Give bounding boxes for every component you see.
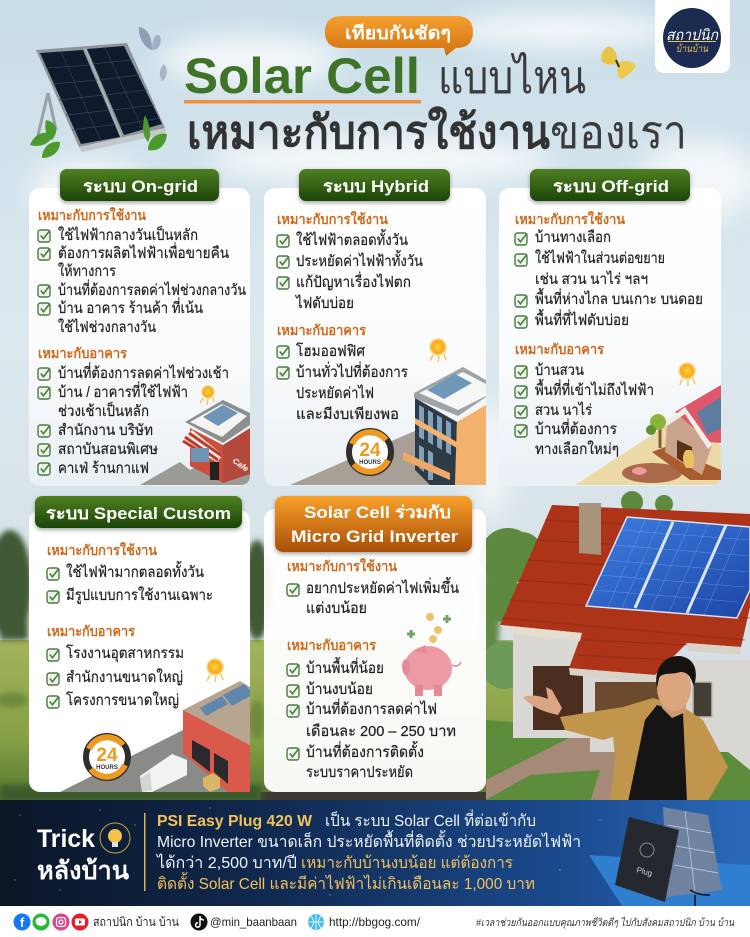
header: On-grid: [60, 169, 219, 201]
heading: suitable use: เหมาะกับการใช้งาน: [515, 210, 625, 227]
list: suitable use: ใช้ไฟฟ้าในส่วนต่อขยาย: [535, 249, 665, 267]
list: suitable buildings: สำนักงาน บริษัท: [58, 422, 153, 439]
text: product description: เหมาะกับบ้านงบน้อย แต่ต้องการ: [301, 854, 513, 872]
grass and driveway: [486, 720, 750, 802]
illustration: cafe with solar roof: Cafe: [231, 456, 251, 474]
list: suitable use: เช่น สวน นาไร่ ฯลฯ: [535, 270, 648, 288]
header: Hybrid: [299, 169, 450, 201]
list: suitable buildings: [287, 657, 456, 781]
icon: line: [32, 914, 50, 930]
title: ของเรา: [550, 106, 687, 158]
list: suitable use: บ้านทางเลือก: [535, 229, 611, 246]
title: เหมาะกับการใช้งาน: [187, 105, 551, 158]
list: suitable use: [515, 229, 703, 329]
list: suitable use: [287, 577, 459, 617]
list: suitable buildings: คาเฟ่ ร้านกาแฟ: [58, 460, 149, 477]
product: PSI Easy Plug: [589, 807, 750, 911]
logo: สถาปนิก: [666, 27, 719, 44]
icon: facebook: [14, 914, 30, 930]
list: suitable buildings: [38, 362, 229, 477]
list: suitable buildings: บ้านที่ต้องการ: [535, 418, 617, 438]
list: suitable use: [38, 225, 246, 336]
icon: instagram: [52, 914, 70, 930]
solar panels on roof: [586, 517, 750, 618]
list: suitable use: [47, 561, 213, 604]
title: Solar Cell: [184, 48, 420, 104]
illustration: piggy bank and coins: [402, 613, 461, 696]
banner: Trick behind the house: [0, 800, 750, 911]
list: suitable buildings: โรงงานอุตสาหกรรม: [66, 644, 184, 663]
list: suitable use: บ้านที่ต้องการลดค่าไฟช่วงกลางวัน: [58, 279, 246, 299]
list: suitable buildings: สำนักงานขนาดใหญ่: [66, 668, 183, 686]
heading: suitable buildings: เหมาะกับอาคาร: [515, 341, 604, 357]
list: suitable buildings: สวน นาไร่: [535, 401, 592, 419]
walls: [513, 630, 590, 738]
panel: On-grid: [29, 169, 251, 486]
text: product description: PSI Easy Plug 420 W: [157, 813, 313, 830]
text: product description: Micro Inverter ขนาดเล็ก ประหยัดพื้นที่ติดตั้ง ช่วยประหยัดไฟฟ้า: [157, 830, 581, 851]
icon: yellow butterfly: [601, 47, 636, 79]
text: product description: [155, 809, 581, 893]
footer: [0, 906, 750, 937]
list: suitable buildings: ระบบราคาประหยัด: [306, 764, 413, 781]
list: suitable buildings: [47, 644, 184, 709]
heading: suitable use: เหมาะกับการใช้งาน: [47, 541, 157, 558]
title illustration: solar panel kit: [30, 43, 167, 158]
icon: tiktok: [190, 914, 208, 930]
list: suitable buildings: ประหยัดค่าไฟ: [296, 384, 374, 402]
header: Solar Cell with Micro Grid Inverter: Solar Cell ร่วมกับ: [304, 503, 451, 522]
list: suitable buildings: โครงการขนาดใหญ่: [66, 691, 179, 709]
list: suitable use: อยากประหยัดค่าไฟเพิ่มขึ้น: [306, 577, 459, 597]
list: suitable buildings: [515, 362, 654, 458]
list: suitable use: พื้นที่ห่างไกล บนเกาะ บนดอย: [535, 288, 703, 308]
heading: behind the house: หลังบ้าน: [37, 857, 129, 885]
list: suitable buildings: เดือนละ 200 – 250 บาท: [306, 723, 456, 740]
list: suitable use: ใช้ไฟฟ้ามากตลอดทั้งวัน: [66, 561, 204, 581]
illustration: cafe with solar roof: [140, 385, 251, 485]
list: suitable buildings: บ้านทั่วไปที่ต้องการ: [296, 361, 408, 381]
title: แบบไหน: [438, 51, 586, 103]
icon: 24 hours: 24: [359, 440, 381, 461]
list: suitable use: ใช้ไฟฟ้ากลางวันเป็นหลัก: [58, 225, 198, 244]
heading: suitable use: เหมาะกับการใช้งาน: [287, 557, 397, 574]
list: suitable use: พื้นที่ที่ไฟดับบ่อย: [535, 309, 629, 329]
header: On-grid: ระบบ On-grid: [83, 177, 198, 196]
text: product description: ได้กว่า 2,500 บาท/ปี: [155, 853, 297, 872]
list: suitable buildings: โฮมออฟฟิศ: [296, 342, 365, 360]
photo: presenter in tan jacket: [523, 656, 728, 802]
illustration: office building with solar roof: [290, 338, 486, 485]
list: suitable use: ต้องการผลิตไฟฟ้าเพื่อขายคืน: [58, 242, 229, 262]
icon: 24 hours: HOURS: [96, 765, 118, 771]
icon: 24 hours: [349, 431, 391, 473]
text: tiktok handle: @min_baanbaan: [210, 915, 297, 929]
panel: Special Custom: [29, 496, 250, 792]
heading: suitable use: เหมาะกับการใช้งาน: [38, 206, 146, 223]
heading: suitable buildings: เหมาะกับอาคาร: [38, 345, 127, 361]
roof: [500, 505, 750, 675]
icon: globe: [308, 914, 324, 930]
product: PSI Easy Plug: Plug: [635, 865, 653, 878]
illustration: farm house with solar roof: [575, 362, 721, 485]
illustration: factory and delivery truck: [60, 658, 250, 792]
header: Special Custom: [35, 496, 242, 528]
list: suitable use: แก้ปัญหาเรื่องไฟตก: [296, 271, 411, 291]
list: suitable use: แต่งบน้อย: [306, 600, 367, 617]
heading: suitable buildings: เหมาะกับอาคาร: [277, 322, 366, 338]
heading: suitable buildings: เหมาะกับอาคาร: [287, 637, 376, 653]
list: suitable buildings: บ้านที่ต้องการลดค่าไฟ: [306, 698, 437, 718]
list: suitable buildings: บ้านพื้นที่น้อย: [306, 657, 384, 677]
list: suitable use: ให้ทางการ: [58, 262, 116, 280]
icon: 24 hours: 24: [96, 745, 118, 766]
panel: Hybrid: [264, 169, 486, 486]
header: Off-grid: ระบบ Off-grid: [553, 177, 669, 196]
logo: [655, 0, 730, 73]
icon: blue butterflies: [139, 27, 167, 81]
list: suitable use: บ้าน อาคาร ร้านค้า ที่เน้น: [58, 297, 203, 317]
text: page name: สถาปนิก บ้าน บ้าน: [93, 915, 179, 929]
panel: Off-grid: [499, 169, 721, 486]
list: suitable buildings: ช่วงเช้าเป็นหลัก: [58, 401, 149, 420]
list: suitable buildings: และมีงบเพียงพอ: [296, 406, 399, 423]
list: suitable use: ใช้ไฟช่วงกลางวัน: [58, 318, 156, 336]
icon: facebook: f: [20, 915, 25, 930]
icon: youtube: [72, 914, 88, 930]
icon: 24 hours: HOURS: [359, 460, 381, 466]
list: suitable use: [277, 229, 423, 312]
list: suitable use: ไฟดับบ่อย: [295, 294, 354, 312]
list: suitable use: ประหยัดค่าไฟฟ้าทั้งวัน: [296, 250, 423, 270]
header: Special Custom: ระบบ Special Custom: [46, 504, 231, 523]
header: Solar Cell with Micro Grid Inverter: Micro Grid Inverter: [291, 527, 458, 546]
list: suitable buildings: บ้าน / อาคารที่ใช้ไฟฟ้า: [58, 381, 188, 401]
text: product description: เป็น ระบบ Solar Cell ที่ต่อเข้ากับ: [325, 809, 536, 830]
list: suitable use: มีรูปแบบการใช้งานเฉพาะ: [66, 586, 213, 604]
heading: suitable buildings: เหมาะกับอาคาร: [47, 623, 135, 639]
heading: Trick: Trick: [37, 825, 95, 853]
icon: light bulb: [100, 823, 130, 853]
text: product description: ติดตั้ง Solar Cell และมีค่าไฟฟ้าไม่เกินเดือนละ 1,000 บาท: [157, 872, 535, 893]
list: suitable buildings: [277, 342, 408, 423]
list: suitable buildings: บ้านที่ต้องการติดตั้ง: [306, 741, 424, 761]
heading: suitable use: เหมาะกับการใช้งาน: [277, 210, 388, 227]
badge: compare clearly: [325, 16, 473, 56]
header: Off-grid: [530, 169, 690, 201]
panel: Solar Cell with Micro Grid Inverter: [264, 496, 486, 792]
list: suitable use: ใช้ไฟฟ้าตลอดทั้งวัน: [296, 229, 408, 249]
icon: 24 hours: [86, 736, 128, 778]
chimney: [579, 503, 601, 555]
list: suitable buildings: พื้นที่ที่เข้าไม่ถึงไฟฟ้า: [535, 379, 654, 399]
list: suitable buildings: บ้านสวน: [535, 362, 584, 379]
logo: บ้านบ้าน: [676, 43, 709, 55]
list: suitable buildings: ทางเลือกใหม่ๆ: [535, 440, 619, 458]
title: [184, 48, 687, 158]
header: Hybrid: ระบบ Hybrid: [323, 177, 429, 196]
text: website: http://bbgog.com/: [329, 915, 421, 929]
header: Solar Cell with Micro Grid Inverter: [275, 496, 472, 552]
photo: house with solar roof: [480, 491, 750, 802]
badge: compare clearly: เทียบกันชัดๆ: [345, 23, 451, 43]
list: suitable buildings: บ้านงบน้อย: [306, 681, 373, 698]
list: suitable buildings: บ้านที่ต้องการลดค่าไฟช่วงเช้า: [58, 362, 229, 382]
list: suitable buildings: สถาบันสอนพิเศษ: [58, 441, 158, 458]
